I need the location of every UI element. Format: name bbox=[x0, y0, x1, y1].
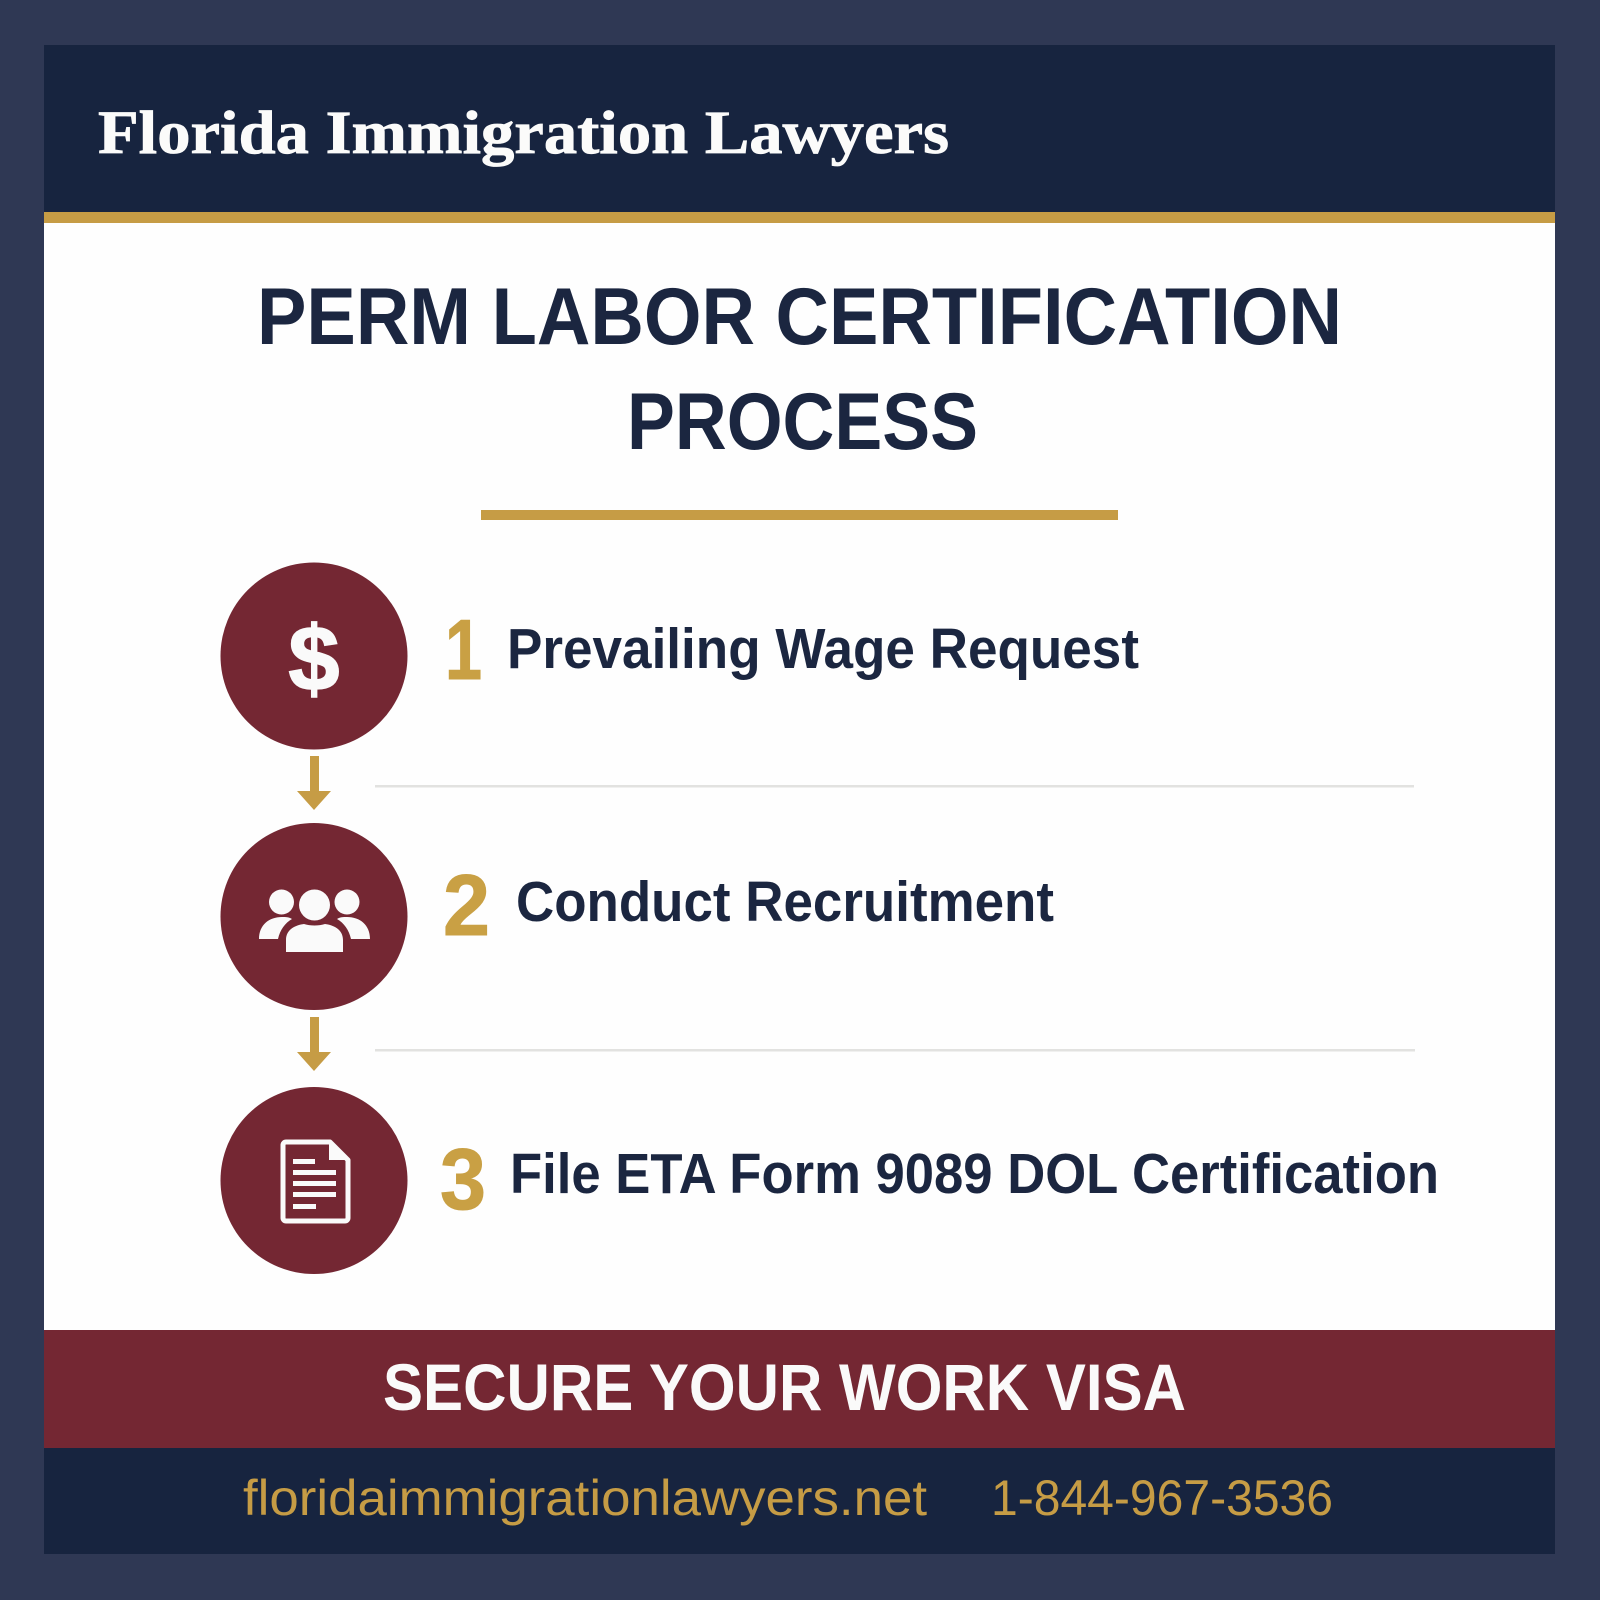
arrow: step 2 to step 3 bbox=[297, 1017, 331, 1071]
header band bbox=[44, 45, 1555, 223]
icon: document in circle bbox=[220, 1087, 408, 1274]
title: PERM LABOR CERTIFICATION bbox=[257, 272, 1342, 362]
header firm name: Florida Immigration Lawyers bbox=[98, 100, 949, 167]
title bbox=[257, 272, 1342, 467]
step number 3: 3 bbox=[440, 1132, 486, 1228]
arrow: step 1 to step 2 bbox=[297, 756, 331, 810]
phone number: 1-844-967-3536 bbox=[991, 1470, 1333, 1526]
call to action banner bbox=[44, 1330, 1555, 1448]
title underline bbox=[481, 510, 1118, 520]
icon: dollar sign in circle bbox=[220, 562, 408, 750]
step number 1: 1 bbox=[445, 603, 482, 698]
step 3 label: File ETA Form 9089 DOL Certification bbox=[510, 1142, 1439, 1206]
title: PROCESS bbox=[627, 377, 978, 467]
icon: dollar sign in circle: $ bbox=[288, 608, 340, 710]
step 2 bbox=[220, 823, 1054, 1010]
website: floridaimmigrationlawyers.net bbox=[243, 1470, 927, 1526]
step number 2: 2 bbox=[443, 858, 490, 954]
footer contact bar bbox=[44, 1448, 1555, 1554]
step 3 bbox=[220, 1087, 1439, 1274]
icon: group of people in circle bbox=[220, 823, 408, 1010]
step 1 label: Prevailing Wage Request bbox=[507, 617, 1139, 681]
call to action banner: SECURE YOUR WORK VISA bbox=[383, 1350, 1186, 1424]
step 2 label: Conduct Recruitment bbox=[516, 870, 1054, 934]
step 1 bbox=[220, 562, 1139, 750]
